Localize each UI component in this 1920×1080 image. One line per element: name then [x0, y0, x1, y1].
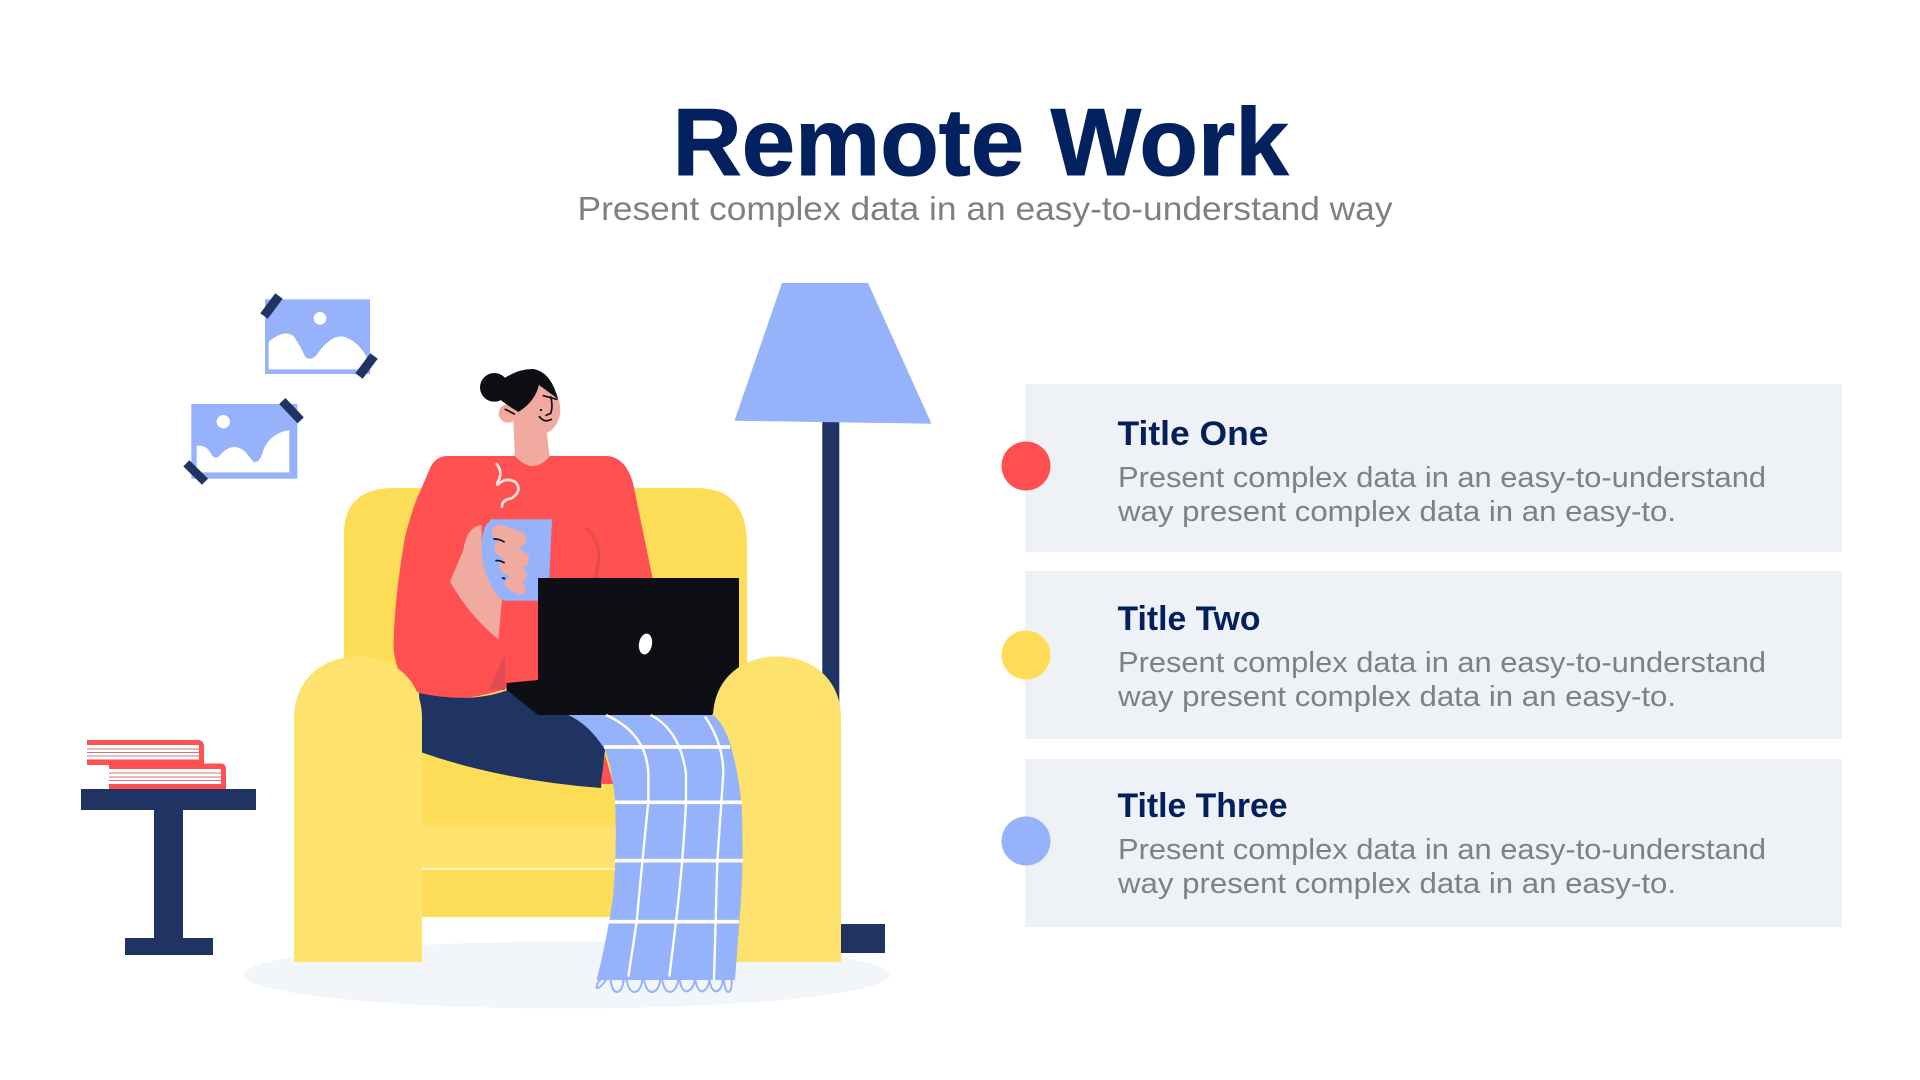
wall picture top [264, 296, 374, 376]
panel: title three [1002, 759, 1842, 927]
text block: title two: Present complex data in an easy-to-understand [1118, 647, 1766, 679]
text block: title two: way present complex data in an easy-to. [1117, 681, 1676, 713]
armchair back and seat [344, 488, 747, 917]
dot: yellow [1002, 630, 1050, 680]
plaid blanket [568, 715, 743, 992]
mug [481, 519, 552, 601]
woman sweater [394, 456, 655, 699]
text block: title one: way present complex data in an easy-to. [1117, 496, 1676, 528]
panel: title one [1002, 384, 1842, 552]
sweater fold [489, 653, 505, 690]
fingers [500, 533, 521, 588]
blanket fringe [597, 975, 732, 992]
woman trousers [419, 690, 605, 788]
subtitle: Present complex data in an easy-to-understand way [578, 190, 1393, 227]
text block: title one: Present complex data in an easy-to-understand [1118, 462, 1766, 494]
wall picture bottom [186, 401, 301, 482]
text block: title three: way present complex data in an easy-to. [1117, 868, 1676, 900]
steam [497, 464, 518, 507]
text block: title three [1117, 834, 1766, 900]
illustration: woman on armchair [81, 283, 932, 1008]
heading: title three: Title Three [1118, 787, 1288, 825]
woman collar skin [515, 456, 550, 466]
floor shadow [244, 942, 890, 1008]
laptop [507, 578, 739, 715]
woman neck and head [480, 369, 560, 460]
dot: red [1002, 442, 1050, 490]
sleeve crease [586, 528, 599, 580]
panel: title two [1002, 571, 1842, 739]
text block: title two [1117, 647, 1766, 713]
left armrest [294, 656, 422, 962]
side table with books [81, 740, 256, 955]
heading: title two: Title Two [1118, 600, 1260, 638]
right armrest [713, 656, 841, 962]
text block: title one [1117, 462, 1766, 528]
dot: blue [1002, 816, 1050, 866]
heading: title one: Title One [1118, 415, 1268, 453]
floor lamp [734, 283, 932, 953]
title: Remote Work [672, 89, 1289, 196]
hand holding mug [450, 464, 599, 639]
text block: title three: Present complex data in an easy-to-understand [1118, 834, 1766, 866]
